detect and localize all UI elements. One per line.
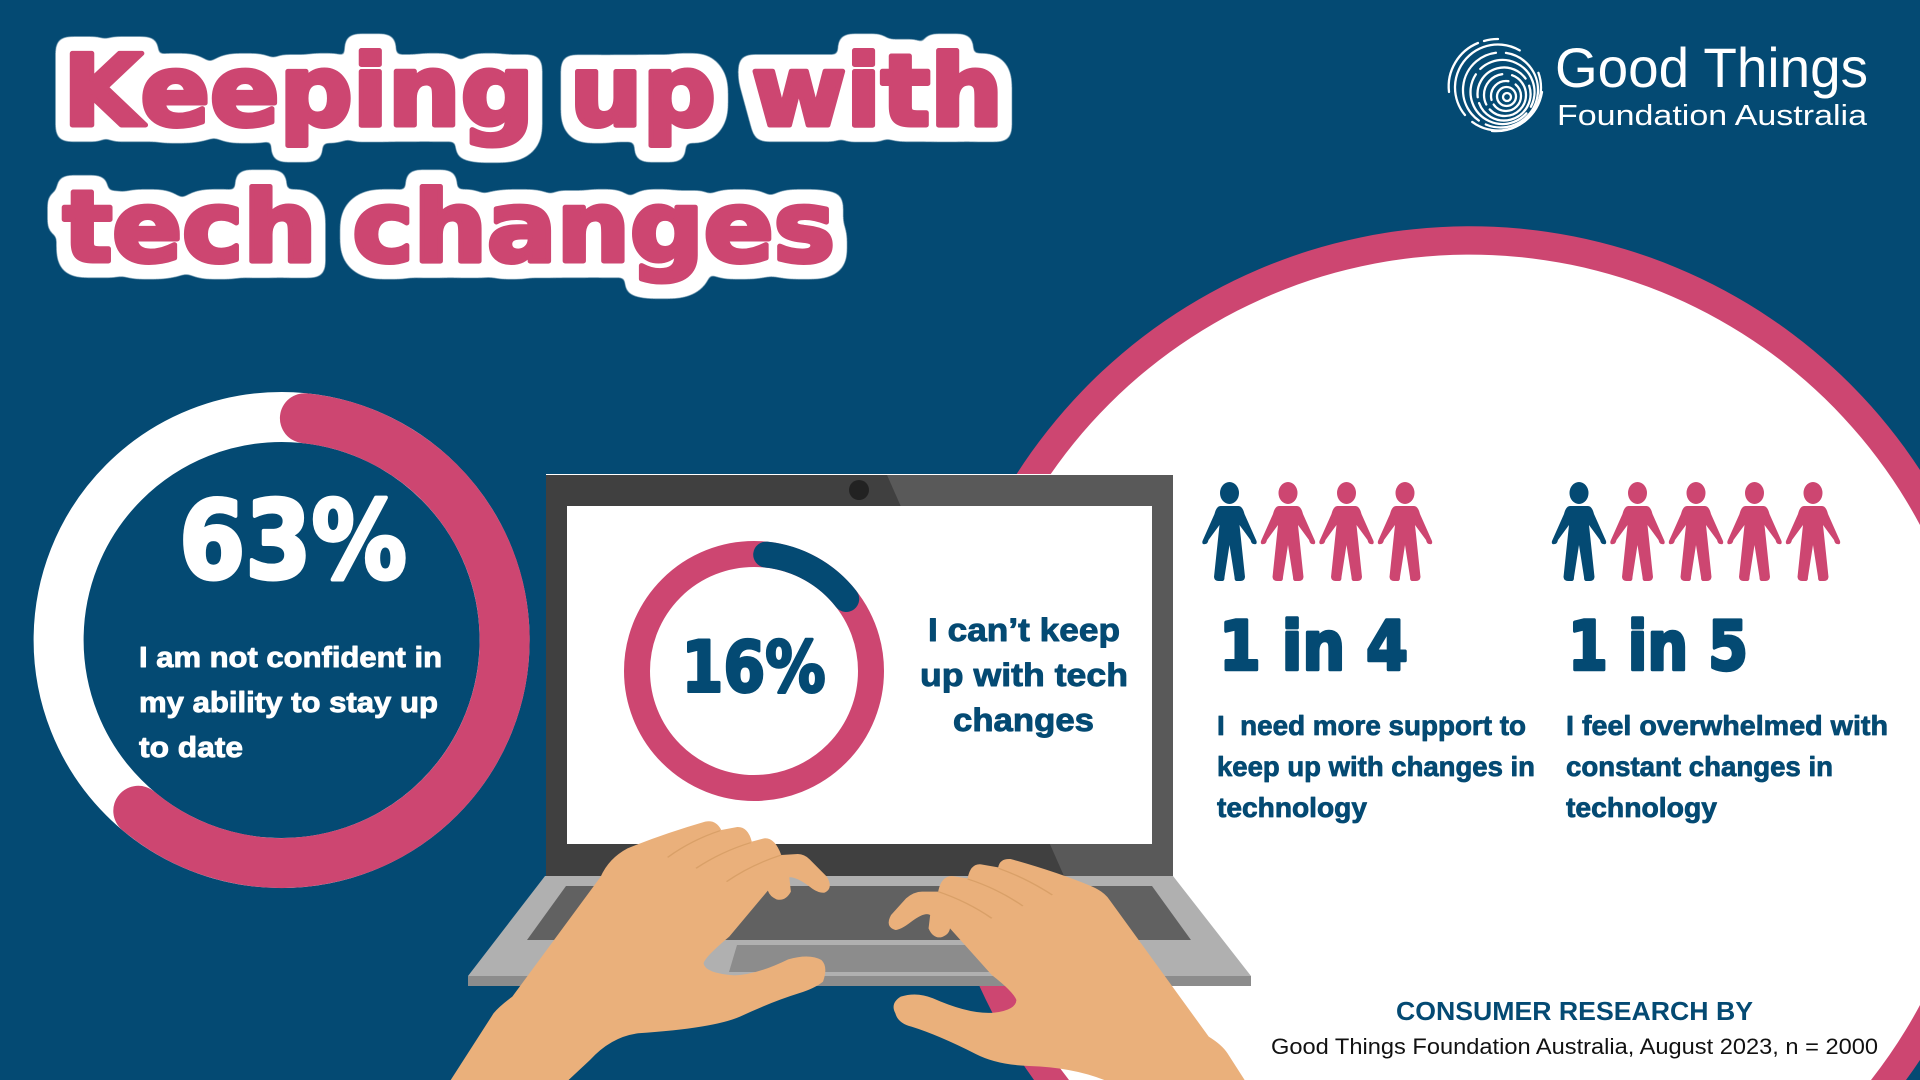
title: Keeping up with <box>63 35 1003 149</box>
1 in 5 value: 1 in 5 <box>1568 608 1748 686</box>
source text: Good Things Foundation Australia, August 2023, n = 2000 <box>1271 1034 1878 1059</box>
right hand <box>889 859 1245 1080</box>
1 in 5 description: I feel overwhelmed with <box>1566 710 1888 741</box>
trackpad <box>729 945 998 972</box>
people row: 1 in 4 <box>1202 482 1432 581</box>
panel: 16% donut on screen <box>637 554 1128 788</box>
logo: Good Things Foundation Australia <box>1443 32 1868 143</box>
16% description: up with tech <box>920 657 1128 693</box>
title: tech changes <box>63 171 835 285</box>
laptop base <box>468 876 1251 976</box>
logo wordmark line 1: Good Things <box>1555 36 1868 99</box>
panel: 1 in 4 <box>1202 482 1535 823</box>
1 in 5 description <box>1566 710 1888 823</box>
laptop top highlight <box>546 474 1173 476</box>
16% description: changes <box>953 702 1094 738</box>
63% value: 63% <box>179 479 407 604</box>
panel: 1 in 5 <box>1552 482 1888 823</box>
panel: 63% donut <box>59 417 505 863</box>
bezel shaded area <box>887 475 1173 876</box>
1 in 4 description: I need more support to <box>1217 710 1526 741</box>
white circle panel with pink ring <box>932 226 1920 1080</box>
1 in 5 description: constant changes in <box>1566 751 1833 782</box>
knuckle creases <box>668 831 1052 918</box>
1 in 4 description: keep up with changes in <box>1217 751 1535 782</box>
16% value: 16% <box>682 626 826 708</box>
1 in 4 description <box>1217 710 1535 823</box>
63% description: I am not confident in <box>139 642 442 674</box>
donut pink ring <box>637 554 871 788</box>
1 in 4 value: 1 in 4 <box>1219 608 1408 686</box>
63% description: my ability to stay up <box>139 687 438 719</box>
title <box>63 35 1003 285</box>
pink ring <box>932 226 1920 1080</box>
logo wordmark line 2: Foundation Australia <box>1557 100 1868 132</box>
1 in 5 description: technology <box>1566 792 1717 823</box>
laptop <box>468 474 1251 986</box>
1 in 4 description: technology <box>1217 792 1367 823</box>
donut track <box>59 417 505 863</box>
white circle <box>960 255 1920 1080</box>
63% description: to date <box>139 732 243 764</box>
left hand <box>451 821 830 1080</box>
screen <box>567 506 1152 844</box>
keyboard <box>527 886 1191 940</box>
laptop front edge <box>468 976 1251 986</box>
laptop bezel <box>546 475 1173 876</box>
donut pink arc <box>138 418 505 863</box>
icon: fingerprint <box>1443 32 1553 143</box>
63% description <box>139 642 442 764</box>
source heading: CONSUMER RESEARCH BY <box>1396 996 1753 1026</box>
hands <box>451 821 1245 1080</box>
donut navy arc <box>766 555 846 599</box>
camera <box>849 480 869 500</box>
people row: 1 in 5 <box>1552 482 1840 581</box>
16% description <box>920 612 1128 738</box>
16% description: I can’t keep <box>928 612 1120 648</box>
